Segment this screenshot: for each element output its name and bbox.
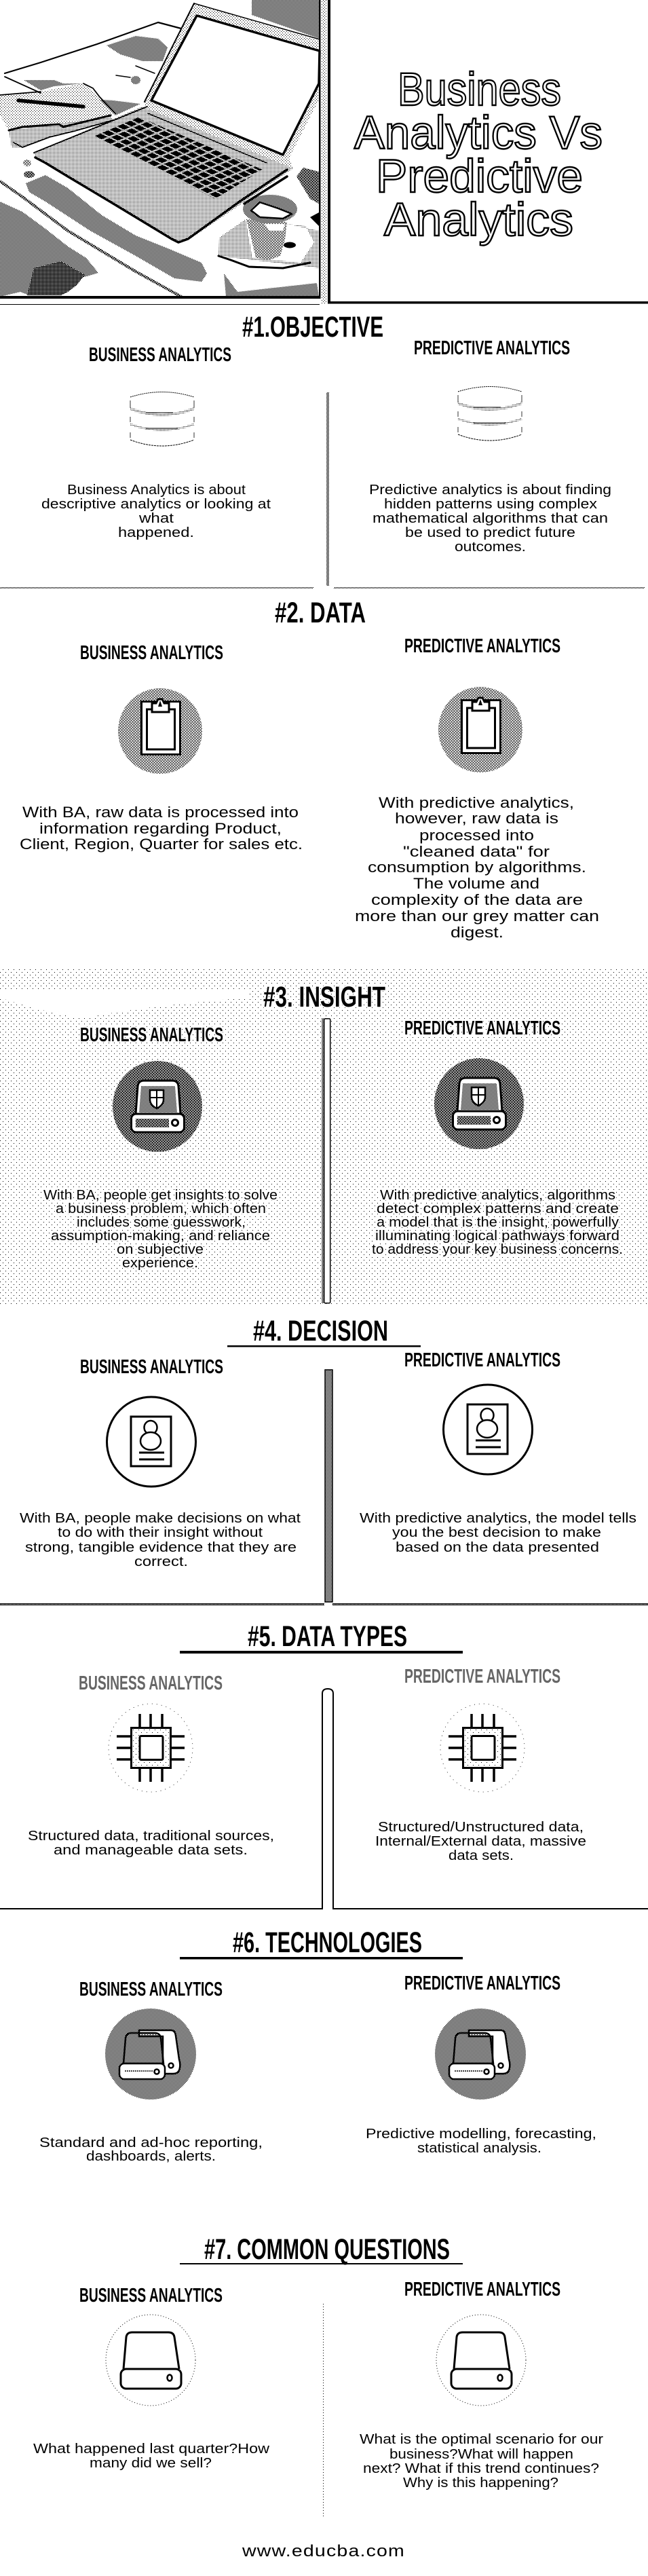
- text: predictive analytics technologies: statistical analysis.: [417, 2141, 541, 2156]
- text: business analytics technologies: [39, 2135, 263, 2164]
- footer url: www.educba.com: [242, 2542, 405, 2560]
- column heading: predictive analytics: PREDICTIVE ANALYTICS: [404, 1349, 560, 1371]
- text: business analytics questions: many did we sell?: [90, 2456, 212, 2471]
- icon: database left: [130, 392, 194, 446]
- heading: common questions: #7. COMMON QUESTIONS: [204, 2233, 450, 2266]
- text: predictive analytics insight: [372, 1188, 623, 1257]
- text: predictive analytics objective: hidden patterns using complex: [384, 497, 597, 512]
- text: business analytics insight: [43, 1188, 278, 1271]
- text: predictive analytics insight: illuminating logical pathways forward: [375, 1229, 620, 1244]
- text: predictive analytics objective: mathematical algorithms that can: [373, 511, 608, 526]
- title: Predictive: [376, 150, 583, 202]
- panel: 2 data: [20, 597, 599, 941]
- text: predictive analytics decision: based on the data presented: [396, 1540, 599, 1555]
- text: business analytics decision: strong, tangible evidence that they are: [25, 1540, 297, 1555]
- heading: decision: #4. DECISION: [253, 1315, 388, 1347]
- icon: hard drive left: [106, 2315, 195, 2406]
- icon: profile card right: [444, 1385, 532, 1474]
- panel: 5 data types: [0, 1620, 648, 1909]
- text: business analytics data types: Structured data, traditional sources,: [28, 1829, 274, 1844]
- column heading: business analytics: BUSINESS ANALYTICS: [79, 1673, 223, 1694]
- icon: chip right: [440, 1704, 525, 1792]
- heading: data types: #5. DATA TYPES: [248, 1620, 407, 1653]
- laptop base: [34, 107, 293, 242]
- text: business analytics technologies: Standard and ad-hoc reporting,: [39, 2135, 263, 2150]
- icon: hard drive right: [436, 2315, 526, 2406]
- column heading: business analytics: BUSINESS ANALYTICS: [80, 1356, 223, 1378]
- text: business analytics data types: [28, 1829, 274, 1858]
- text: business analytics technologies: dashboards, alerts.: [86, 2149, 216, 2164]
- open book with pen: [0, 83, 115, 130]
- text: business analytics insight: on subjective: [117, 1242, 204, 1257]
- text: predictive analytics decision: With predictive analytics, the model tells: [360, 1511, 636, 1526]
- text: predictive analytics data: With predictive analytics,: [379, 794, 574, 811]
- text: predictive analytics technologies: Predictive modelling, forecasting,: [366, 2127, 596, 2142]
- text: predictive analytics data: [355, 794, 599, 941]
- text: predictive analytics technologies: [366, 2127, 596, 2156]
- text: business analytics data: Client, Region, Quarter for sales etc.: [20, 836, 303, 853]
- text: business analytics decision: correct.: [134, 1554, 188, 1569]
- column heading: business analytics: BUSINESS ANALYTICS: [79, 1979, 223, 2000]
- heading: technologies: #6. TECHNOLOGIES: [233, 1926, 422, 1959]
- text: predictive analytics questions: [360, 2432, 603, 2490]
- text: predictive analytics data: The volume and: [413, 875, 539, 892]
- title: Analytics: [384, 193, 573, 246]
- icon: drives right: [435, 2009, 526, 2099]
- text: business analytics data: information regarding Product,: [39, 820, 282, 837]
- text: business analytics questions: [33, 2442, 270, 2471]
- text: business analytics objective: what: [138, 511, 174, 526]
- text: business analytics insight: a business problem, which often: [56, 1201, 266, 1216]
- heading: data: #2. DATA: [275, 597, 366, 629]
- text: business analytics data: [20, 804, 303, 853]
- column heading: business analytics: BUSINESS ANALYTICS: [89, 344, 231, 366]
- text: predictive analytics decision: you the best decision to make: [392, 1525, 601, 1540]
- notebook page behind the laptop: [0, 22, 181, 114]
- text: business analytics objective: Business Analytics is about: [67, 483, 246, 498]
- text: predictive analytics data: consumption by algorithms.: [368, 859, 586, 876]
- title: [354, 63, 603, 246]
- text: predictive analytics data types: [375, 1820, 586, 1863]
- text: business analytics data types: and manageable data sets.: [54, 1843, 248, 1858]
- column heading: business analytics: BUSINESS ANALYTICS: [80, 642, 223, 664]
- text: business analytics decision: [20, 1511, 301, 1569]
- heading: objective: #1.OBJECTIVE: [242, 311, 383, 343]
- text: predictive analytics data: "cleaned data" for: [403, 843, 550, 860]
- icon: shielded drive left: [113, 1061, 202, 1152]
- trackpad: [81, 158, 166, 199]
- column heading: business analytics: BUSINESS ANALYTICS: [79, 2285, 223, 2307]
- column heading: predictive analytics: PREDICTIVE ANALYTICS: [404, 1018, 560, 1039]
- panel: 4 decision: [0, 1315, 648, 1605]
- text: business analytics insight: assumption-making, and reliance: [51, 1229, 270, 1244]
- text: predictive analytics insight: detect complex patterns and create: [377, 1201, 619, 1216]
- text: business analytics insight: includes some guesswork,: [77, 1215, 246, 1230]
- text: predictive analytics questions: Why is this happening?: [403, 2476, 558, 2490]
- text: predictive analytics questions: What is the optimal scenario for our: [360, 2432, 603, 2447]
- text: predictive analytics objective: be used to predict future: [405, 525, 575, 540]
- text: business analytics decision: With BA, people make decisions on what: [20, 1511, 301, 1526]
- text: predictive analytics data: however, raw data is: [395, 810, 558, 827]
- text: predictive analytics data types: data sets.: [449, 1848, 514, 1863]
- text: predictive analytics data types: Structured/Unstructured data,: [378, 1820, 584, 1835]
- keyboard: [93, 117, 263, 199]
- panel: 3 insight: [0, 969, 648, 1305]
- column heading: predictive analytics: PREDICTIVE ANALYTICS: [414, 337, 570, 359]
- column heading: predictive analytics: PREDICTIVE ANALYTICS: [404, 1973, 560, 1994]
- text: predictive analytics data: digest.: [451, 924, 503, 941]
- text: predictive analytics insight: With predictive analytics, algorithms: [380, 1188, 615, 1203]
- text: predictive analytics objective: Predictive analytics is about finding: [369, 483, 611, 498]
- text: predictive analytics insight: to address your key business concerns.: [372, 1242, 623, 1257]
- laptop lid: [145, 3, 320, 158]
- panel: 7 common questions: [33, 2233, 603, 2518]
- text: business analytics decision: to do with their insight without: [58, 1525, 263, 1540]
- column heading: predictive analytics: PREDICTIVE ANALYTICS: [404, 2279, 560, 2300]
- text: predictive analytics data: complexity of the data are: [371, 891, 583, 908]
- title: Business: [398, 63, 561, 115]
- title: Analytics Vs: [354, 107, 603, 159]
- text: business analytics objective: [41, 483, 271, 540]
- text: predictive analytics questions: next? What if this trend continues?: [363, 2461, 599, 2476]
- icon: shielded drive right: [434, 1058, 524, 1149]
- column heading: business analytics: BUSINESS ANALYTICS: [80, 1024, 223, 1046]
- text: predictive analytics data: more than our grey matter can: [355, 908, 599, 925]
- coffee cup and saucer: [224, 274, 319, 297]
- icon: chip left: [109, 1704, 193, 1792]
- desk stains and strips: [0, 181, 181, 297]
- text: business analytics insight: experience.: [122, 1256, 198, 1271]
- text: business analytics objective: descriptive analytics or looking at: [41, 497, 271, 512]
- text: predictive analytics objective: outcomes.: [455, 540, 526, 555]
- column heading: predictive analytics: PREDICTIVE ANALYTICS: [404, 635, 560, 657]
- icon: clipboard right: [438, 687, 522, 772]
- column heading: predictive analytics: PREDICTIVE ANALYTICS: [404, 1666, 560, 1687]
- text: business analytics insight: With BA, people get insights to solve: [43, 1188, 278, 1203]
- text: predictive analytics decision: [360, 1511, 636, 1555]
- text: business analytics questions: What happened last quarter?How: [33, 2442, 270, 2457]
- text: predictive analytics objective: [369, 483, 611, 555]
- text: business analytics objective: happened.: [118, 525, 194, 540]
- text: business analytics data: With BA, raw data is processed into: [22, 804, 299, 821]
- icon: clipboard left: [118, 688, 202, 774]
- icon: profile card left: [107, 1397, 195, 1487]
- panel: 1 objective: [0, 311, 645, 589]
- text: predictive analytics insight: a model that is the insight, powerfully: [377, 1215, 619, 1230]
- icon: drives left: [105, 2009, 196, 2099]
- background grey surface: [252, 0, 320, 39]
- text: predictive analytics data: processed into: [419, 827, 534, 844]
- text: predictive analytics questions: business?What will happen: [389, 2447, 573, 2462]
- panel: 6 technologies: [39, 1926, 596, 2164]
- heading: insight: #3. INSIGHT: [263, 981, 385, 1013]
- hero photo: laptop on desk: [0, 0, 320, 297]
- icon: database right: [458, 387, 522, 441]
- text: predictive analytics data types: Internal/External data, massive: [375, 1834, 586, 1849]
